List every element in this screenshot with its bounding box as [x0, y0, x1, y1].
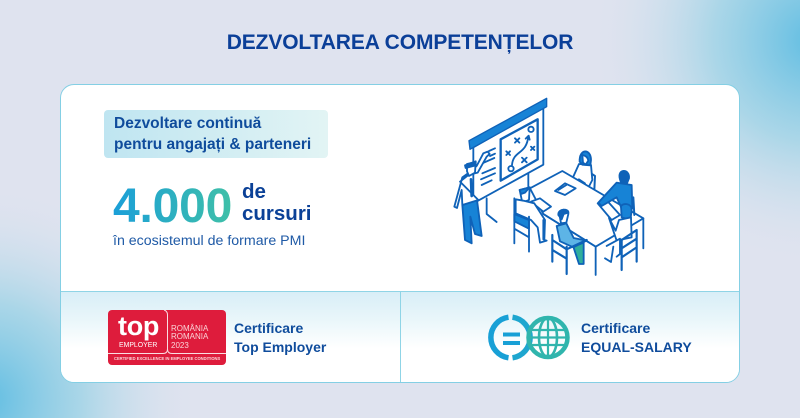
chair and person: left [514, 187, 547, 252]
text: Equal-Salary certification: Certificare [581, 320, 650, 336]
column divider [400, 292, 401, 383]
title: DEZVOLTAREA COMPETENȚELOR [227, 31, 573, 54]
chair and person: front right [605, 204, 637, 270]
presenter [454, 152, 490, 243]
projection screen [469, 98, 547, 222]
logo divider lines [108, 310, 226, 354]
callout: continuous development: pentru angajați & parteneri [114, 136, 311, 153]
logo country: ROMÂNIA [171, 324, 208, 333]
equal mark [491, 317, 530, 358]
logo wordmark: top [118, 311, 159, 341]
meeting table and people [514, 151, 643, 275]
text: Equal-Salary certification [581, 320, 692, 355]
logo country [171, 324, 208, 341]
logo country: ROMANIA [171, 332, 208, 341]
globe mark [528, 318, 568, 357]
text: ecosystem caption: în ecosistemul de formare PMI [113, 233, 305, 249]
logo: Equal-Salary [488, 314, 570, 360]
text: Top Employer certification: Top Employer [234, 339, 326, 355]
text: de cursuri [242, 180, 312, 225]
chair and person: top [568, 151, 595, 194]
person: right [598, 171, 634, 215]
text: de cursuri: cursuri [242, 202, 312, 225]
text: Top Employer certification [234, 320, 326, 355]
callout: continuous development: Dezvoltare continuă [114, 115, 261, 132]
logo year: 2023 [171, 341, 189, 350]
chair and person: front [552, 210, 587, 274]
text: de cursuri: de [242, 180, 266, 203]
panel: main card [60, 84, 740, 383]
projection screen and presenter [454, 98, 547, 243]
logo strapline: CERTIFIED EXCELLENCE IN EMPLOYEE CONDITIONS [114, 356, 220, 360]
logo employer: EMPLOYER [119, 342, 157, 349]
panel: certifications row [61, 291, 739, 383]
stat: 4.000: 4.000 [113, 180, 232, 233]
table top [530, 171, 643, 275]
logo: Top Employer [108, 310, 226, 365]
callout: continuous development [104, 110, 328, 158]
text: Equal-Salary certification: EQUAL-SALARY [581, 339, 692, 355]
text: Top Employer certification: Certificare [234, 320, 303, 336]
